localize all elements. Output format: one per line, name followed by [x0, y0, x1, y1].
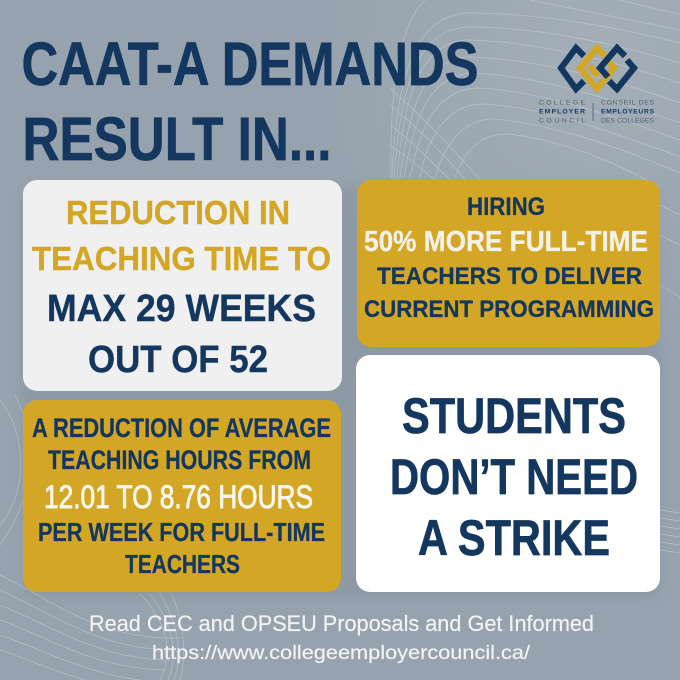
panel: students don't need a strike [356, 355, 660, 592]
logo wordmark [539, 100, 654, 125]
panel text: max 29 weeks out of 52: MAX 29 WEEKS [47, 288, 316, 330]
panel text: hiring: HIRING [467, 193, 545, 221]
panel text: teachers to deliver current programming [364, 263, 654, 323]
panel: reduction of average teaching hours [23, 400, 341, 592]
panel text: reduction of average teaching hours from: TEACHING HOURS FROM [48, 445, 311, 475]
logo wordmark: DES COLLÈGES [601, 116, 654, 125]
panel text: per week for full-time teachers: TEACHERS [125, 549, 240, 579]
panel text: reduction in teaching time [32, 194, 331, 277]
panel text: reduction of average teaching hours from: A REDUCTION OF AVERAGE [32, 413, 331, 443]
logo wordmark: CONSEIL DES [601, 100, 654, 106]
footer: call to action and link: Read CEC and OPSEU Proposals and Get Informed [89, 611, 594, 636]
footer: call to action and link [89, 611, 594, 664]
panel text: reduction in teaching time: TEACHING TIME TO [32, 240, 331, 277]
panel text: max 29 weeks out of 52: OUT OF 52 [88, 339, 268, 381]
panel text: slogan [390, 388, 638, 566]
panel text: per week for full-time teachers [38, 517, 325, 579]
logo wordmark: COLLEGE [539, 100, 585, 106]
panel text: per week for full-time teachers: PER WEEK FOR FULL-TIME [38, 517, 325, 547]
panel text: teachers to deliver current programming: TEACHERS TO DELIVER [377, 263, 642, 290]
logo wordmark: EMPLOYER [539, 109, 585, 116]
panel text: reduction in teaching time: REDUCTION IN [66, 194, 290, 231]
title [22, 30, 478, 174]
logo wordmark: EMPLOYEURS [601, 109, 654, 116]
logo wordmark: COUNCIL [539, 118, 585, 125]
panel text: 12.01 to 8.76 hours: 12.01 TO 8.76 HOURS [44, 479, 313, 515]
panel text: reduction of average teaching hours from [32, 413, 331, 475]
title: CAAT-A DEMANDS [22, 30, 478, 99]
title: RESULT IN... [22, 105, 332, 174]
logo: College Employer Council [539, 48, 654, 125]
panel: hiring more full-time teachers [357, 180, 660, 347]
panel text: slogan: A STRIKE [418, 510, 610, 566]
panel text: max 29 weeks out of 52 [47, 288, 316, 381]
panel text: 50% more full-time: 50% MORE FULL-TIME [364, 226, 648, 258]
panel text: teachers to deliver current programming: CURRENT PROGRAMMING [364, 296, 654, 323]
icon: interlocking chevrons [561, 48, 634, 89]
panel: teaching time reduction [23, 180, 342, 391]
footer: call to action and link: https://www.collegeemployercouncil.ca/ [152, 642, 531, 664]
panel text: slogan: STUDENTS [402, 388, 626, 444]
